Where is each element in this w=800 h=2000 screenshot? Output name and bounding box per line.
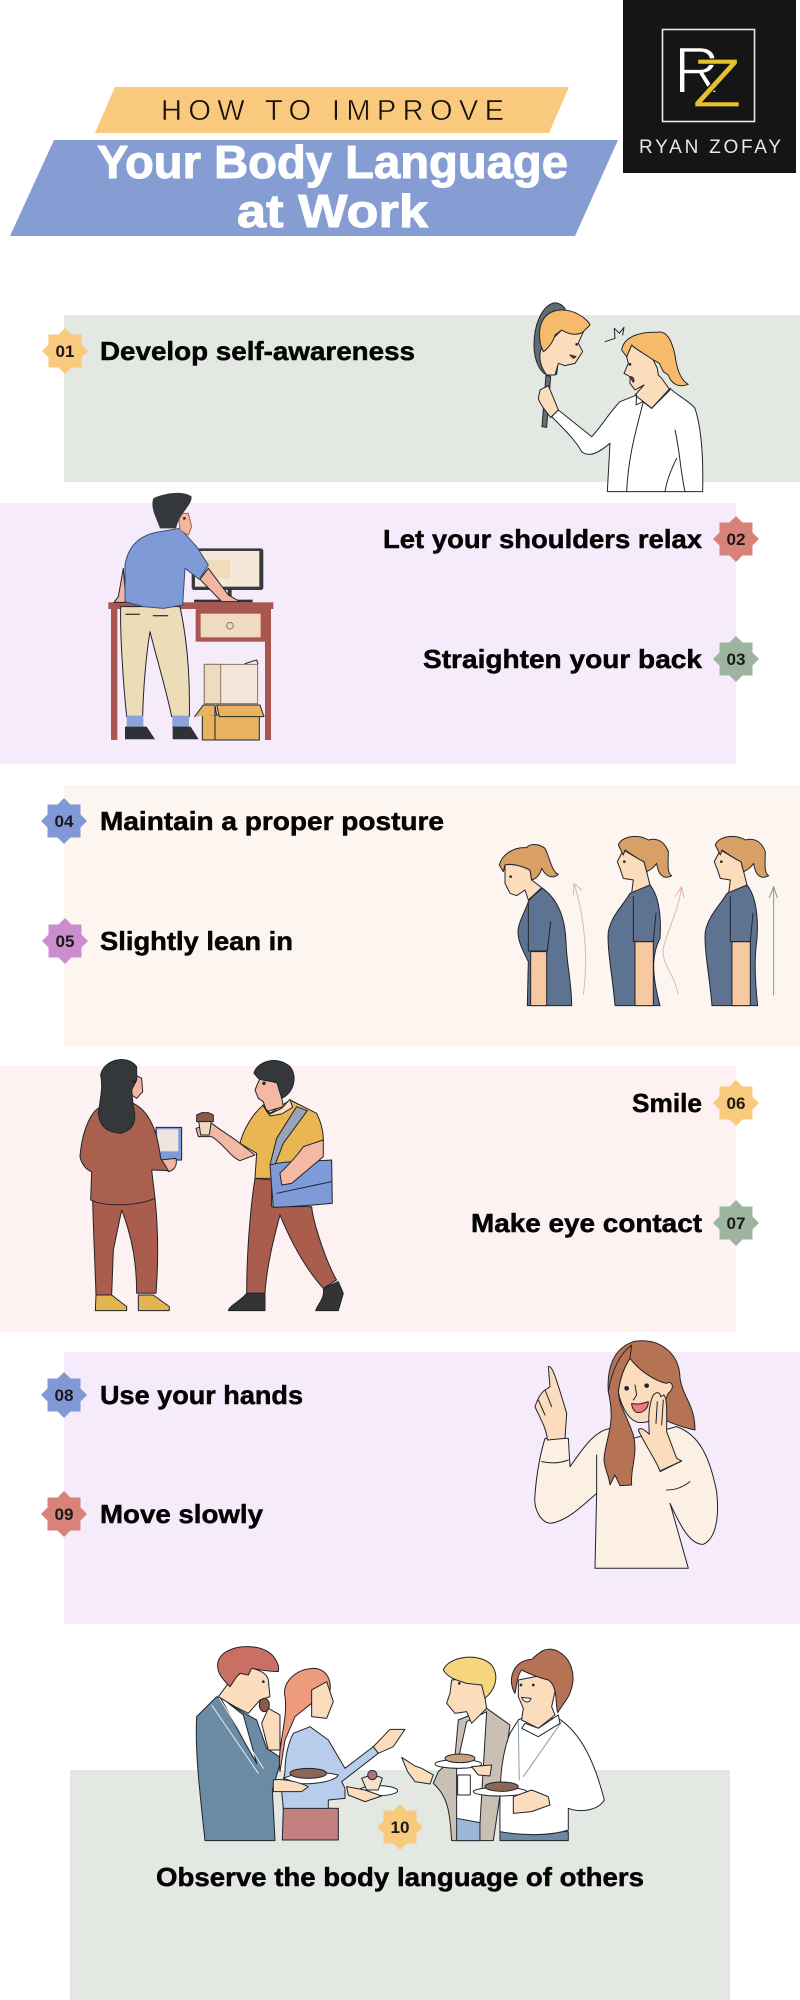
label: straighten your back: Straighten your back [423, 644, 703, 674]
figure: man with coffee and bag [196, 1061, 343, 1311]
badge 07: 07 [726, 1214, 746, 1233]
label: observe the body language of others: Observe the body language of others [156, 1862, 644, 1892]
badge 01 [42, 328, 88, 374]
logo: Ryan Zofay: Z [692, 44, 742, 122]
figure: man in blue suit eating [196, 1647, 282, 1841]
badge 05: 05 [56, 932, 74, 951]
badge 06 [713, 1080, 759, 1126]
title ribbon: your body language at work: Your Body Language [97, 136, 568, 188]
panel: hands and movement [41, 1341, 800, 1624]
label: slightly lean in: Slightly lean in [100, 926, 293, 956]
badge 08 [41, 1372, 87, 1418]
title ribbon: your body language at work [10, 136, 618, 237]
figure: blond man [402, 1657, 510, 1841]
badge 02: 02 [726, 530, 746, 549]
label: let your shoulders relax: Let your shoulders relax [383, 524, 703, 554]
label: smile: Smile [632, 1088, 702, 1118]
illustration: woman gesturing with hands [535, 1341, 718, 1568]
figure: straight posture [705, 836, 769, 1006]
badge 03 [713, 636, 759, 682]
panel: smile and eye contact [0, 1059, 759, 1332]
illustration: three posture stages with arrows [499, 836, 777, 1006]
title ribbon: your body language at work: at Work [237, 185, 428, 237]
title ribbon: how to improve: HOW TO IMPROVE [161, 95, 504, 127]
figure: curved posture [608, 836, 672, 1006]
label: develop self-awareness: Develop self-awareness [100, 336, 415, 366]
title ribbon: how to improve [95, 87, 569, 133]
badge 01: 01 [56, 342, 74, 361]
panel: observe others [70, 1647, 730, 2000]
logo: Ryan Zofay: RYAN ZOFAY [639, 137, 781, 158]
badge 03: 03 [726, 650, 746, 669]
figure: woman with tablet [80, 1059, 182, 1311]
badge 02 [713, 516, 759, 562]
badge 07 [713, 1200, 759, 1246]
illustration: man standing at a desk [108, 493, 273, 740]
label: maintain a proper posture: Maintain a proper posture [100, 806, 444, 836]
label: use your hands: Use your hands [100, 1380, 303, 1410]
logo: Ryan Zofay [623, 0, 796, 173]
illustration: two colleagues talking [80, 1059, 343, 1311]
panel: develop self-awareness [42, 303, 800, 492]
arrow: slouched [573, 883, 586, 994]
badge 05 [42, 918, 88, 964]
arrow: curved [663, 887, 684, 994]
figure: slouched posture [499, 844, 572, 1006]
badge 10: 10 [390, 1818, 410, 1837]
badge 04: 04 [54, 812, 74, 831]
figure: woman with ponytail and white shirt [473, 1649, 604, 1841]
arrow: straight [769, 887, 777, 995]
badge 04 [41, 798, 87, 844]
illustration: colleagues chatting over food [196, 1647, 604, 1841]
label: move slowly: Move slowly [100, 1499, 264, 1529]
title block [10, 87, 618, 237]
label: make eye contact: Make eye contact [471, 1208, 702, 1238]
panel: shoulders and back [0, 493, 759, 764]
badge 09: 09 [54, 1505, 74, 1524]
logo: Ryan Zofay: R [674, 33, 720, 107]
badge 08: 08 [54, 1386, 74, 1405]
illustration: woman looking in a mirror [534, 303, 703, 492]
badge 06: 06 [726, 1094, 746, 1113]
panel: posture and lean [41, 785, 800, 1046]
badge 10 [377, 1804, 423, 1850]
badge 09 [41, 1491, 87, 1537]
figure: woman in light blue top [273, 1668, 405, 1840]
